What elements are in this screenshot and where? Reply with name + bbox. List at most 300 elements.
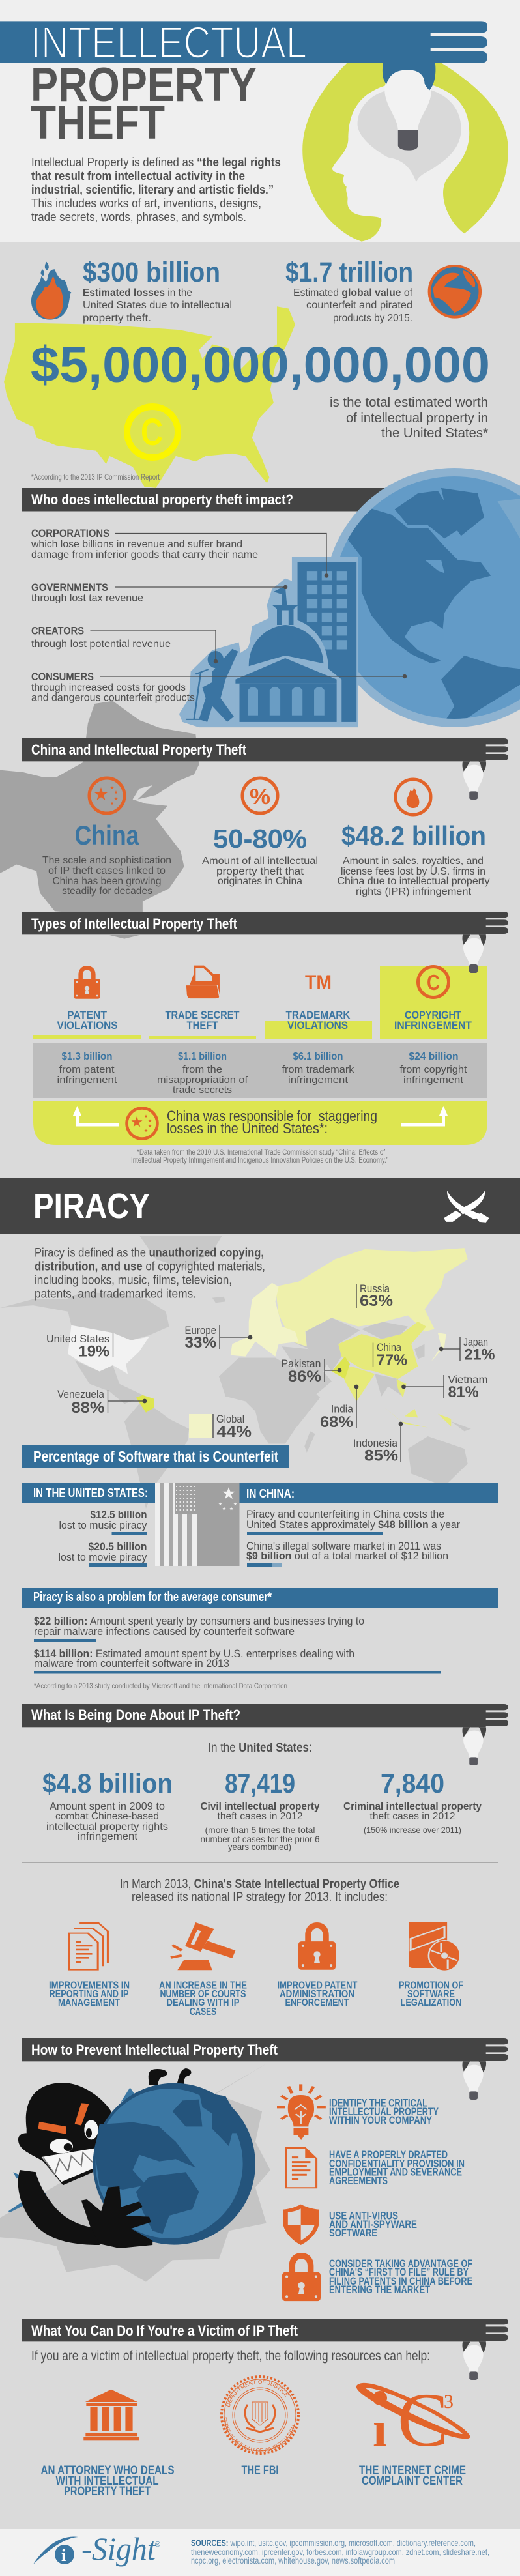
stat: 7,840: theft cases in 2012 [370,1811,455,1822]
stat: $1.7 trillion: $1.7 trillion [285,257,413,288]
icon: percent ring: % [250,785,270,809]
strategy: patent enforcement: IMPROVED PATENT [278,1980,358,1991]
indonesia [383,1406,451,1428]
india 68%: India [331,1402,353,1415]
icon: percent ring [242,778,278,813]
global 44%: Global [216,1413,244,1425]
$114 billion stat: $114 billion: Estimated amount spent by U.S. enterprises dealing with [34,1647,354,1660]
icon: courthouse [83,2390,139,2440]
russia 63% [356,1282,393,1310]
icon: software box and disc [409,1922,461,1971]
tip: first to file [282,2253,472,2301]
losses table [33,1043,487,1098]
tip: first to file: CHINA'S “FIRST TO FILE” RULE BY [329,2266,469,2278]
$22 billion stat: repair malware infections caused by counterfeit software [34,1625,295,1638]
resource: FBI [220,2375,300,2478]
pakistan [332,1357,350,1379]
creators [31,626,171,650]
indonesia 85%: Indonesia [353,1437,397,1449]
tip: first to file: ENTERING THE MARKET [329,2283,430,2296]
types bulb over the copyright panel [463,939,484,973]
eyebrows [38,2103,89,2134]
icon: IC3 logo [356,2377,470,2463]
footnote: microsoft study: *According to a 2013 study conducted by Microsoft and the International Data Corporation [34,1681,287,1690]
illegal market stat: $9 billion out of a total market of $12 billion [246,1550,448,1562]
russia 63%: 63% [360,1292,393,1310]
united states 19%: 19% [78,1342,109,1361]
strategy: more courts [159,1922,247,2018]
global 44% [189,1413,252,1441]
strategy: patent enforcement [278,1922,358,2008]
$22 billion stat: $22 billion: Amount spent yearly by consumers and businesses trying to [34,1615,364,1627]
china stat: China: China [74,820,139,850]
stat: $4.8 billion: infringement [78,1831,138,1842]
vietnam 81%: 81% [448,1383,478,1401]
panel: average consumer: Piracy is also a problem for the average consumer* [33,1590,272,1604]
tip: anti-virus [283,2205,417,2245]
footer logo: i-Sight: -Sight [81,2530,156,2567]
icon: lightbulb [277,2084,326,2140]
stat: 87,419: Civil intellectual property [201,1801,320,1812]
callout: china responsible: China was responsible for staggering [167,1108,377,1124]
china stat: $48.2 billion [338,779,490,897]
arm [18,2170,106,2245]
stat: 7,840: Criminal intellectual property [343,1801,482,1812]
arrow: right [401,1106,448,1126]
title banner with claw hand [0,21,487,90]
type: copyright infringement [394,967,472,1032]
illegal market stat: China's illegal software market in 2011 was [246,1540,441,1552]
icon: shield [283,2205,319,2245]
china stat: 50-80%: originates in China [218,876,302,887]
stat: $1.7 trillion: products by 2015. [333,313,412,324]
intro definition text: Intellectual Property is defined as “the legal rights [31,156,281,169]
corporations: which lose billions in revenue and suffer brand [31,539,242,550]
icon: gavel [171,1922,235,1970]
thief head [18,2083,111,2185]
icon: folder [186,966,220,999]
heading bar: types: Types of Intellectual Property Theft [31,916,238,932]
title: PROPERTY THEFT [31,59,257,149]
icon: globe [428,265,482,319]
tip: confidentiality provision: AGREEMENTS [329,2175,388,2187]
hand [81,2186,152,2248]
tip: identify critical IP: IDENTIFY THE CRITICAL [329,2097,427,2109]
strategy: improvements in reporting [49,1923,130,2008]
russia [275,1248,468,1346]
tip: anti-virus: SOFTWARE [329,2227,377,2239]
china stat: 50-80%: Amount of all intellectual [202,856,318,867]
trademark loss: infringement [288,1075,349,1086]
japan 21%: Japan [463,1336,488,1348]
china stat: China [42,778,171,897]
strategy: more courts: CASES [190,2006,216,2018]
united states 19% [46,1333,113,1361]
stat: $4.8 billion: intellectual property rights [46,1821,168,1832]
strategy: software legalization [399,1922,463,2008]
stat: 87,419 [201,1768,320,1852]
tip: confidentiality provision: HAVE A PROPERLY DRAFTED [329,2149,448,2161]
pakistan 86%: Pakistan [282,1357,321,1370]
copyright loss: $24 billion [409,1051,459,1062]
icon: TM: TM [305,972,332,993]
piracy definition [35,1246,265,1301]
governments: GOVERNMENTS [31,582,108,594]
world map [0,1236,471,1509]
footnote: trade commission: Intellectual Property Infringement and Indigenous Innovation Policies on the U.S. Economy.” [131,1157,388,1165]
thief stealing the globe [8,2068,255,2248]
venezuela 88%: 88% [72,1399,104,1417]
icon: flame [31,262,71,320]
proportion bars [33,966,487,1039]
strategy: more courts: AN INCREASE IN THE [159,1980,247,1991]
china stat: China: steadily for decades [62,886,152,897]
japan 21%: 21% [464,1346,495,1363]
title: PROPERTY THEFT: THEFT [31,96,165,149]
heading bar: how to prevent: How to Prevent Intellectual Property Theft [31,2042,278,2058]
strategy: software legalization: PROMOTION OF [399,1980,463,1991]
corporations: damage from inferior goods that carry their name [31,549,258,560]
china stat: $48.2 billion: rights (IPR) infringement [356,886,472,897]
stat: $1.7 trillion: Estimated global value of [293,287,413,298]
stat: $1.7 trillion: counterfeit and pirated [306,300,412,311]
heading bar: what is being done [22,1704,508,1765]
type: trade secret theft [166,966,240,1032]
footnote: trade commission: *Data taken from the 2010 U.S. International Trade Commission study “China: Effects of [137,1149,386,1157]
heading bar: who does IP theft impact: Who does intellectual property theft impact? [31,491,293,508]
icon: copyright: C [427,970,440,994]
patent loss [57,1051,117,1086]
stat: 87,419: theft cases in 2012 [218,1811,303,1822]
consumers: and dangerous counterfeit products [31,692,195,704]
resource: internet crime complaint center: THE INTERNET CRIME [359,2464,466,2478]
US map [4,306,295,488]
russia 63%: Russia [360,1282,390,1295]
thief background burst [0,2062,270,2282]
piracy definition: Piracy is defined as the unauthorized copying, [35,1246,264,1260]
map callouts [46,1282,495,1465]
tip: identify critical IP [277,2084,439,2140]
$48 billion stat [246,1508,460,1535]
creators: through lost potential revenue [31,639,171,650]
china 77% [373,1341,407,1369]
resource: attorney: WITH INTELLECTUAL [56,2474,159,2488]
$114 billion stat: malware from counterfeit software in 2013 [34,1657,229,1670]
grin [42,2149,94,2182]
icon: IC3 logo: ı [373,2401,387,2457]
callout: china responsible [33,1101,487,1145]
continents [338,488,520,727]
patent loss: from patent [59,1064,115,1075]
trade secret loss: trade secrets [173,1084,232,1095]
impact list [31,528,407,704]
type: trademark violations: TRADEMARK [285,1009,351,1021]
panel: average consumer [22,1588,498,1690]
copyright symbol: C [141,411,163,454]
stat: 7,840 [343,1768,482,1835]
china strategy text: In March 2013, China's State Intellectual Property Office [120,1877,399,1891]
china [338,1322,426,1379]
stat: 7,840: 7,840 [381,1768,444,1799]
$114 billion stat [34,1647,441,1673]
icon: FBI seal: FEDERAL BUREAU OF INVESTIGATION [223,2418,296,2452]
$22 billion stat [34,1615,364,1642]
patent loss: infringement [57,1075,117,1086]
venezuela 88%: Venezuela [57,1388,104,1400]
india [341,1367,375,1401]
trade secret loss: misappropriation of [157,1075,248,1086]
strategy: patent enforcement: ENFORCEMENT [285,1997,349,2008]
united states [68,1325,149,1374]
intro definition text: industrial, scientific, literary and artistic fields.” [31,183,274,196]
resource: attorney: PROPERTY THEFT [64,2485,151,2498]
footer logo: i-Sight: ® [155,2541,160,2549]
japan [431,1333,446,1361]
copyright loss: infringement [403,1075,464,1086]
venezuela [136,1395,154,1413]
stat: $300 billion: $300 billion [83,257,220,288]
piracy definition: distribution, and use of copyrighted materials, [35,1260,265,1273]
tip: first to file: CONSIDER TAKING ADVANTAGE OF [329,2257,472,2270]
icon: china flag ring [89,778,124,813]
icon: padlock [282,2253,321,2301]
cape [8,2087,136,2212]
stat: 7,840: (150% increase over 2011) [364,1825,461,1835]
china map background [0,701,199,939]
type: patent violations [57,966,117,1032]
tip: anti-virus: AND ANTI-SPYWARE [329,2218,417,2231]
europe 33%: Europe [185,1324,216,1337]
stat: $4.8 billion [42,1768,173,1842]
governments: through lost tax revenue [31,593,143,603]
movie piracy stat: $20.5 billion [89,1541,147,1553]
icon: document [286,2148,317,2188]
panel: in china: IN CHINA: [246,1487,295,1500]
icon: IC3 logo: C [397,2377,448,2463]
capitol building [235,586,341,725]
title: PROPERTY THEFT: PROPERTY [31,59,257,111]
type: patent violations: PATENT [67,1009,107,1021]
china stat: 50-80%: property theft that [216,866,304,877]
china stat: 50-80% [202,778,318,887]
office tower [298,562,356,722]
leader lines [90,533,407,678]
pakistan 86%: 86% [288,1368,321,1385]
icon: documents [69,1923,108,1970]
icon: FBI seal: DEPARTMENT OF JUSTICE [226,2380,289,2407]
icon: padlock [74,966,100,999]
illegal market stat [246,1540,448,1567]
strategy: patent enforcement: ADMINISTRATION [280,1989,354,2000]
stat: 87,419: (more than 5 times the total [205,1825,315,1835]
corporations: CORPORATIONS [31,528,109,540]
panel: in china [240,1483,498,1567]
icon: crossed swords [444,1191,489,1223]
flags: us and china [155,1483,240,1566]
movie piracy stat [59,1541,147,1567]
heading bar: china: China and Intellectual Property Theft [31,742,247,758]
type: trademark violations: VIOLATIONS [287,1020,348,1032]
intro definition text: trade secrets, words, phrases, and symbols. [31,210,246,224]
resource: internet crime complaint center: COMPLAINT CENTER [362,2474,463,2488]
china stat: $48.2 billion: Amount in sales, royalties, and [343,856,484,867]
resource: internet crime complaint center [356,2377,470,2488]
china stat: China: China has been growing [52,876,162,887]
globe continents [94,2092,247,2234]
movie piracy stat: lost to movie piracy [59,1551,147,1563]
trademark loss: from trademark [282,1064,354,1075]
china stat: 50-80%: 50-80% [213,824,307,854]
tip: identify critical IP: INTELLECTUAL PROPERTY [329,2106,439,2118]
piracy definition: including books, music, films, television, [35,1273,232,1288]
icon: padlock [298,1922,336,1970]
trade secret loss: $1.1 billion [178,1051,227,1062]
icon: flame ring [396,779,431,815]
music piracy stat: $12.5 billion [90,1509,147,1521]
china 77%: 77% [377,1352,407,1369]
title: INTELLECTUAL: INTELLECTUAL [31,18,307,68]
china stat: $48.2 billion: China due to intellectual property [338,876,490,887]
heading bar: types [22,912,508,973]
stat: 87,419: number of cases for the prior 6 [201,1834,320,1844]
trademark loss: $6.1 billion [293,1051,343,1062]
us flag [155,1483,197,1566]
patent loss: $1.3 billion [61,1051,112,1062]
arrow: left [73,1106,119,1126]
footnote: trade commission [131,1149,388,1165]
strategy: more courts: NUMBER OF COURTS [160,1989,246,2000]
europe 33%: 33% [185,1334,216,1352]
feet [149,2068,191,2085]
panel: in the united states [22,1483,155,1567]
piracy definition: patents, and trademarked items. [35,1288,196,1301]
heading bar: china [22,738,508,800]
eyes [50,2120,98,2154]
strategy: improvements in reporting: IMPROVEMENTS IN [49,1980,130,1991]
stat: $4.8 billion: Amount spent in 2009 to [50,1801,165,1812]
globe [93,2083,255,2245]
strategy: software legalization: SOFTWARE [407,1989,455,2000]
stat: $4.8 billion: combat Chinese-based [55,1811,159,1822]
tip: confidentiality provision: EMPLOYMENT AND SEVERANCE [329,2166,462,2178]
consumers: through increased costs for goods [31,682,186,693]
footer logo: i-Sight [33,2530,160,2567]
type: trade secret theft: TRADE SECRET [166,1009,240,1021]
tip: identify critical IP: WITHIN YOUR COMPANY [329,2114,433,2126]
intro definition text: This includes works of art, inventions, designs, [31,197,261,210]
china stat: $48.2 billion: license fees lost by U.S. firms in [341,866,485,877]
panel: in the united states: IN THE UNITED STATES: [33,1486,148,1499]
china strategy text: released its national IP strategy for 2013. It includes: [132,1890,388,1904]
creators: CREATORS [31,626,84,637]
total worth text [330,395,488,441]
music piracy stat: lost to music piracy [59,1519,147,1531]
stat: $4.8 billion: $4.8 billion [42,1768,173,1799]
piracy banner: PIRACY [33,1187,150,1226]
heading bar: how to prevent [22,2038,508,2100]
china flag [197,1483,240,1566]
footer logo: i-Sight: i [61,2546,66,2565]
consumers [31,671,195,704]
building halo [179,557,358,727]
vietnam 81% [401,1374,487,1401]
strategy: improvements in reporting: REPORTING AND IP [50,1989,129,2000]
type: trade secret theft: THEFT [186,1020,218,1032]
corporations [31,528,258,560]
china stat: China: The scale and sophistication [42,855,171,866]
pakistan 86% [282,1357,341,1385]
tip: confidentiality provision [286,2148,465,2188]
heading bar: what you can do [22,2319,508,2380]
icon: IC3 logo: 3 [444,2391,454,2412]
type: patent violations: VIOLATIONS [57,1020,117,1032]
indonesia 85%: 85% [364,1447,398,1465]
intro definition text [31,156,281,224]
intro definition text: that result from intellectual activity in the [31,169,245,182]
stat: $300 billion: Estimated losses in the [83,287,192,298]
callout: china responsible: losses in the United States*: [167,1120,328,1136]
type: copyright infringement: INFRINGEMENT [394,1020,472,1032]
indonesia 85% [353,1422,403,1465]
europe 33% [185,1324,252,1352]
victim resources intro: If you are a victim of intellectual property theft, the following resources can help: [31,2349,430,2364]
europe [231,1283,298,1357]
globe with buildings [179,468,520,727]
grey landmasses [0,1236,471,1509]
stat: 87,419: 87,419 [225,1768,295,1799]
united states 19%: United States [46,1333,109,1345]
heading bar: who does IP theft impact [22,488,386,511]
tip: first to file: FILING PATENTS IN CHINA BEFORE [329,2275,472,2287]
trade secret loss [157,1051,248,1095]
copyright symbol [127,407,178,457]
heading bar: what you can do: What You Can Do If You're a Victim of IP Theft [31,2323,298,2339]
piracy banner [0,1178,520,1234]
strategy: more courts: DEALING WITH IP [167,1997,240,2008]
heading bar: counterfeit software [22,1445,289,1468]
$48 billion stat: Piracy and counterfeiting in China costs the [246,1508,444,1520]
india 68%: 68% [320,1413,353,1431]
vietnam 81%: Vietnam [448,1374,487,1385]
total worth text: the United States* [381,426,488,441]
china 77%: China [377,1341,401,1353]
vietnam [396,1379,407,1398]
musician figure [186,649,238,722]
venezuela 88% [57,1388,147,1417]
globe [325,468,520,727]
consumers: CONSUMERS [31,671,94,683]
japan 21% [439,1336,495,1363]
subheading: in the united states: In the United States: [209,1741,311,1755]
icon: china flag ring [126,1108,158,1139]
music piracy stat [59,1509,147,1535]
strategy: software legalization: LEGALIZATION [400,1997,461,2008]
india 68% [320,1385,358,1431]
governments [31,582,143,603]
copyright loss: from copyright [400,1064,467,1075]
type: trademark violations [285,972,351,1032]
china strategy text [120,1877,399,1904]
tip: anti-virus: USE ANTI-VIRUS [329,2209,398,2222]
footer sources [191,2538,489,2566]
stat: $300 billion: property theft. [83,313,151,324]
stat: 87,419: years combined) [228,1842,291,1852]
resource: FBI: THE FBI [241,2464,279,2478]
resource: attorney [40,2390,175,2498]
big number: five trillion: $5,000,000,000,000 [31,337,490,393]
tip: confidentiality provision: CONFIDENTIALITY PROVISION IN [329,2157,465,2170]
total worth text: is the total estimated worth [330,395,488,410]
